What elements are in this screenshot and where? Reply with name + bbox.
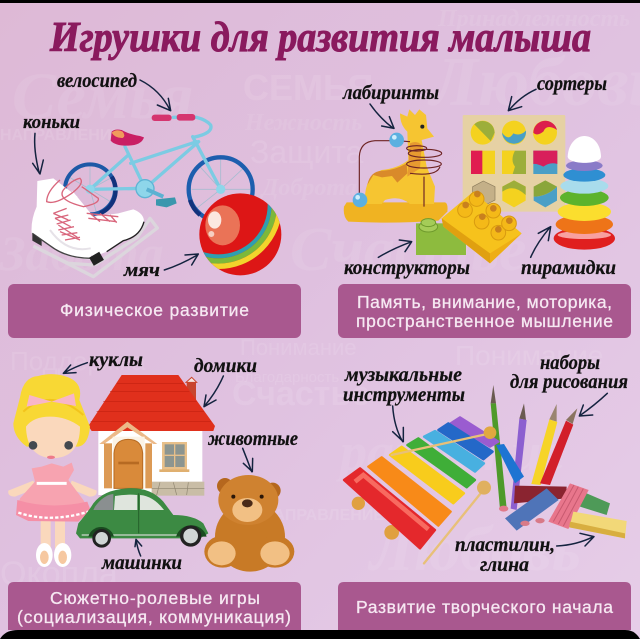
label: sorters: сортеры <box>537 73 607 95</box>
watermark words: Понимание <box>240 335 357 360</box>
icon: doll <box>8 374 97 567</box>
panel: creative toys: глина <box>480 554 529 576</box>
bottom black strip <box>0 630 640 639</box>
watermark words: НАПРАВЛЕНИЕ <box>262 507 384 524</box>
icon: car <box>76 488 208 548</box>
label: pyramids: пирамидки <box>521 257 616 279</box>
panel: memory and motor toys <box>342 73 616 279</box>
caption: physical development <box>8 284 301 338</box>
title: Игрушки для развития малыша <box>49 15 591 61</box>
icon: xylophone <box>344 417 498 563</box>
label: constructors: конструкторы <box>344 257 470 279</box>
arrows <box>393 393 607 546</box>
icon: ball <box>199 193 282 276</box>
arrows <box>63 363 253 556</box>
icon: building blocks <box>416 191 522 263</box>
label: musical instruments: музыкальные <box>344 364 462 386</box>
icon: house <box>88 375 215 496</box>
caption: role play <box>8 582 301 630</box>
watermark words: Защита <box>250 134 364 170</box>
caption: role play: Сюжетно-ролевые игры <box>50 588 260 608</box>
label: cars: машинки <box>101 552 182 574</box>
caption: memory and attention: пространственное мышление <box>356 311 613 331</box>
label: dolls: куклы <box>89 349 143 371</box>
icon: ice skates <box>32 178 157 277</box>
label: skates: коньки <box>23 112 80 133</box>
caption: creativity <box>338 582 631 630</box>
watermark words: СЕМЬЯ <box>243 67 373 108</box>
watermark words: развитие <box>336 422 565 482</box>
label: animals: животные <box>207 428 298 450</box>
label: houses: домики <box>194 355 257 377</box>
watermark words: Счастье <box>290 216 526 284</box>
panel: creative toys <box>343 352 628 576</box>
caption: physical development: Физическое развитие <box>60 300 249 320</box>
label: plasticine: пластилин, <box>455 534 555 556</box>
caption: memory and attention <box>338 284 631 338</box>
icon: giraffe labyrinth <box>344 109 448 223</box>
watermark words: Нежность <box>244 110 362 136</box>
labels and arrows <box>33 80 198 270</box>
watermark words: Окопла <box>0 555 118 593</box>
watermark words: Семья <box>12 60 194 133</box>
arrows <box>370 89 551 257</box>
panel: creative toys: инструменты <box>343 384 465 406</box>
watermark words: Доброта <box>260 175 357 201</box>
icon: bicycle <box>65 114 253 221</box>
watermark words: Любовь <box>367 513 581 584</box>
watermark words: Забота <box>0 225 164 281</box>
icon: shape sorter <box>463 115 565 212</box>
icon: teddy bear <box>204 475 294 572</box>
label: ball: мяч <box>123 260 160 281</box>
top black strip <box>0 0 640 3</box>
watermark words: Благодарность <box>235 369 339 386</box>
label: labyrinths: лабиринты <box>342 82 439 104</box>
watermark words: Счастье <box>232 375 370 413</box>
caption: memory and attention: Память, внимание, моторика, <box>357 292 612 312</box>
icon: ring pyramid <box>554 136 615 250</box>
panel: physical development toys <box>23 70 281 281</box>
icon: pencils <box>491 385 577 512</box>
watermark words: Понимание <box>455 340 603 371</box>
label: drawing sets: наборы <box>540 352 600 374</box>
watermark words: Поддержка <box>10 346 146 376</box>
label: bicycle: велосипед <box>57 70 137 92</box>
watermark words: НАПРАВЛЕНИЕ <box>0 127 122 144</box>
panel: creative toys: для рисования <box>510 371 628 393</box>
icon: plasticine <box>505 483 627 538</box>
watermark words: Принадлежность <box>437 6 630 32</box>
panel: role play toys <box>8 349 298 574</box>
caption: role play: (социализация, коммуникация) <box>17 607 291 627</box>
caption: creativity: Развитие творческого начала <box>356 597 613 617</box>
